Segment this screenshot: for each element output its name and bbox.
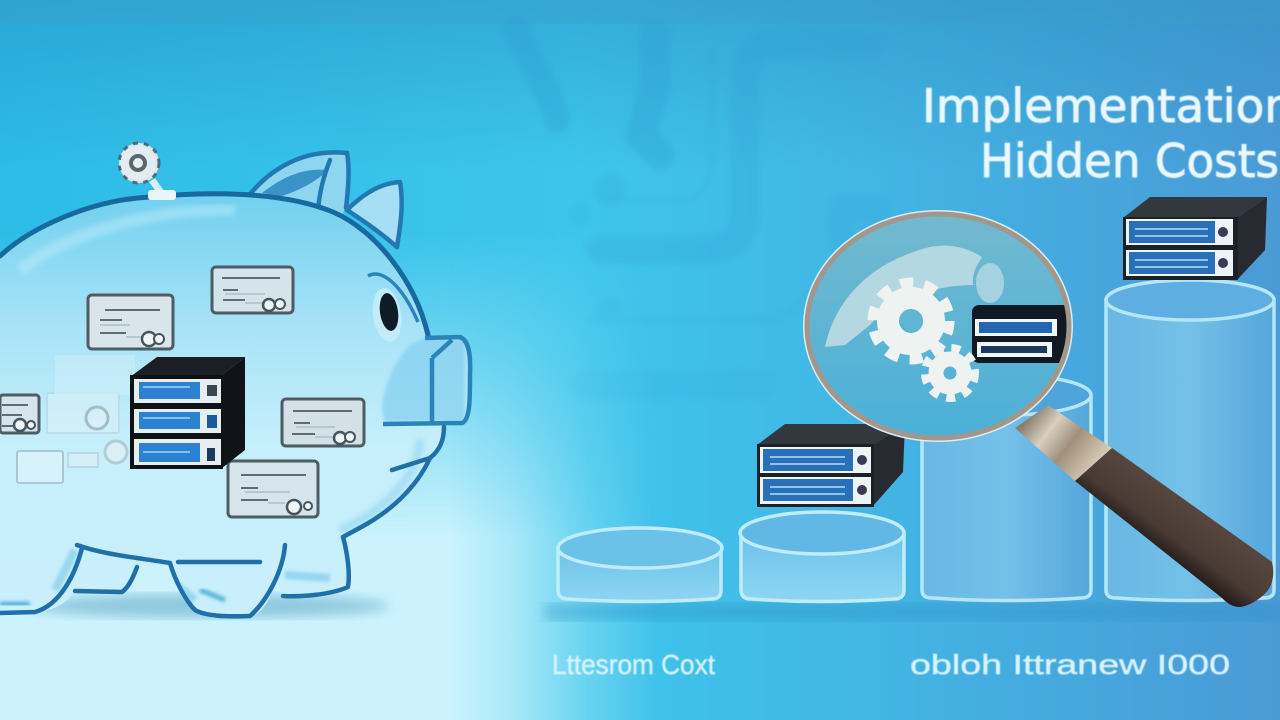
bill card 4 [228,461,318,517]
pig ears [237,152,402,265]
lens highlight [825,246,982,347]
pig snout [383,337,470,424]
large gear in lens [873,283,949,359]
bill card 2 [212,267,293,313]
bill card 1 [88,295,173,349]
server stack in pig [130,357,245,469]
pig body fill [0,194,470,616]
pig eye [368,274,418,344]
faint circuit background pattern [515,30,880,385]
bill card 5 cut at left edge [0,395,39,433]
server on bar 4 [1123,197,1267,280]
title: Implementation [922,79,1280,133]
title [922,79,1280,188]
pig belly and legs [0,427,444,616]
left axis label: Lttesrom Coxt [552,649,715,680]
magnifier rim [804,211,1072,441]
magnifier lens [806,213,1070,439]
right axis label: obloh Ittranew I000 [910,649,1230,680]
bar 1: short glass cylinder [558,528,722,602]
cylinder shadows [545,604,1280,620]
title: Hidden Costs [980,134,1279,188]
magnifying glass [804,211,1273,607]
small gear on pig coin slot [119,143,176,200]
magnifier handle [1015,405,1273,607]
small gear in lens [925,348,975,398]
pig interior highlights [0,210,465,604]
server on bar 2 [757,424,905,507]
bar 4: tallest glass cylinder [1106,280,1274,600]
faded bills behind server [17,355,135,483]
bill card 3 [282,399,364,446]
pig back and head line [0,194,428,335]
server in lens [972,305,1066,363]
piggy bank [0,152,470,616]
bar 2: low glass cylinder [740,512,904,602]
ground shadow under pig [30,594,390,618]
bar 3: tall glass cylinder [921,375,1091,600]
